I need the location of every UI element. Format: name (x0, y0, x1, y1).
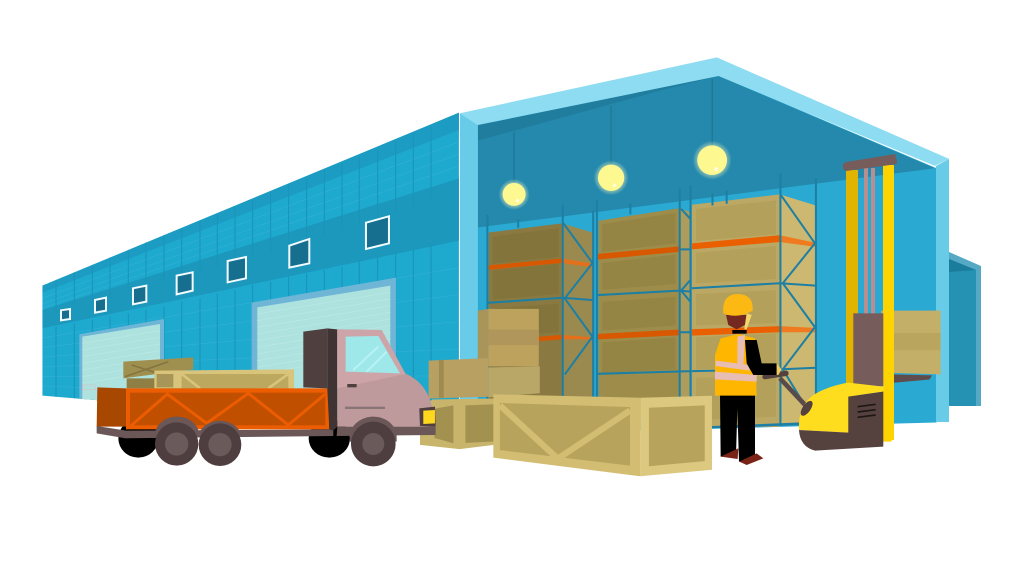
worker in vest and helmet (715, 294, 782, 465)
arm (745, 340, 777, 375)
head and helmet (723, 294, 753, 334)
rack 2 with pallets (597, 186, 691, 418)
cargo crates (123, 357, 294, 388)
forklift body (765, 313, 892, 451)
cab (303, 328, 436, 436)
right pillar (936, 159, 949, 422)
truck bed (97, 387, 329, 429)
warehouse illustration (42, 57, 981, 476)
roller door 2 (252, 278, 396, 430)
forklift mast (843, 154, 897, 440)
rear wheels (155, 417, 242, 466)
roof trim (460, 57, 949, 166)
hanging light 1 (499, 132, 530, 210)
left side wall with panels, windows and roller doors (40, 110, 463, 433)
large wooden crate (493, 394, 712, 476)
safety vest (715, 334, 757, 396)
pallet load on forklift (881, 311, 941, 383)
hanging light 3 (693, 79, 732, 180)
rear wheels shadow (118, 419, 350, 458)
stacked cardboard boxes (420, 309, 540, 449)
forklift (765, 154, 897, 451)
open end interior, racks, lights and frame (460, 57, 949, 439)
interior back wall (477, 75, 937, 435)
annex building on the right (949, 252, 981, 406)
hanging light 2 (594, 106, 629, 195)
chassis (97, 426, 333, 438)
windows (61, 216, 389, 320)
rack 3 with pallets (691, 173, 816, 429)
truck (97, 328, 436, 466)
legs (720, 395, 755, 462)
ceiling (478, 76, 935, 227)
rack 1 with pallets (487, 205, 593, 422)
front wheel (350, 417, 397, 466)
left pillar (460, 113, 478, 439)
roller door 1 (79, 319, 164, 400)
